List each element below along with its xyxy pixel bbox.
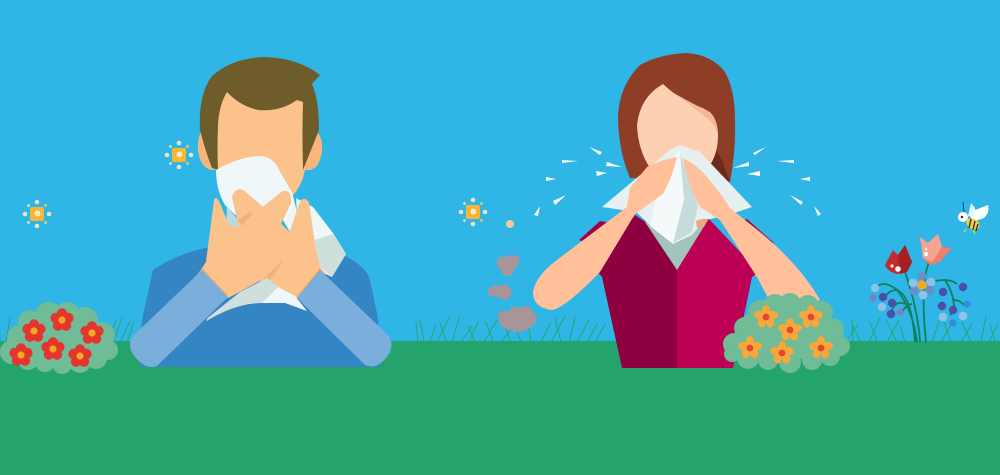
dust and particles [488,220,537,332]
pink tulip petal [920,234,942,262]
red tulip [885,245,912,274]
bush: orange flowers [723,293,850,373]
woman: face [637,84,718,168]
man: tissue drape [296,198,346,277]
man: left sleeve [130,270,228,367]
ground [0,341,1000,475]
bush: red flowers [0,302,118,374]
woman: back of right arm [750,260,820,300]
man: back hand [233,190,320,297]
pollen grains [23,141,487,228]
man: tissue shadow [315,234,346,277]
woman: tissue fold shadow [673,152,698,243]
man: wrists [197,268,326,301]
woman: tissue folds [650,150,698,244]
woman: shirt right [677,218,759,368]
woman: shirt left [594,215,677,368]
icon: bee [958,202,988,234]
figure: woman sneezing [533,53,820,368]
woman: finger [696,219,708,228]
man: face [216,92,305,205]
woman: left arm [533,157,677,310]
woman: neckline [645,212,708,270]
woman: sleeves behind [579,219,774,246]
man: finger shading [238,212,284,285]
woman: hair shadow [708,150,730,182]
man: tissue white fold [262,287,307,311]
plant: tulips and berries [869,234,971,342]
man: tissue on face [216,156,302,232]
woman: tissue [602,145,752,244]
man: front hand [202,192,290,297]
man: shirt shoulders [140,248,380,367]
man: ears [198,130,322,170]
man: shirt centre [155,303,365,367]
grass tufts [0,312,998,342]
figure: man blowing nose [130,57,392,367]
man: hair [200,57,320,170]
red tulip shade [898,245,912,274]
pink tulip [920,234,952,265]
woman: right arm [683,158,820,320]
woman: face shade [672,92,718,135]
woman: hair [618,53,735,182]
man: tissue drip [226,207,240,234]
sneeze droplets [534,147,821,216]
berries [869,283,971,327]
tulip highlights [890,248,928,272]
man: tissue under hands [206,278,290,323]
stems [878,262,965,342]
man: right sleeve [297,270,392,366]
blue flower [909,272,935,299]
